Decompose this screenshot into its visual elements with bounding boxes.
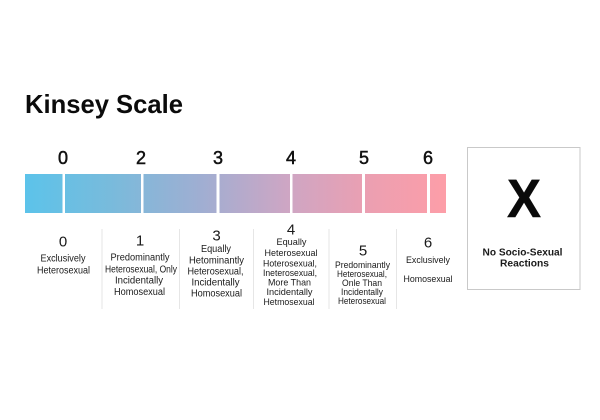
description: 5: Heterosexual <box>338 296 386 306</box>
description: 4: Incidentally <box>266 287 313 298</box>
scale numbers: 3 <box>213 148 223 168</box>
description: 4: Ineterosexual, <box>263 268 317 279</box>
title: Kinsey Scale <box>25 91 183 119</box>
description: 4: Equally <box>276 237 307 248</box>
description: 3: Homosexual <box>191 288 242 300</box>
description: 3 <box>188 228 244 300</box>
panel caption: Reactions <box>500 258 549 270</box>
panel caption: No Socio-Sexual <box>482 248 563 258</box>
scale numbers: 0 <box>58 148 68 168</box>
description: 4: 4 <box>287 222 295 238</box>
description: 0: 0 <box>59 234 67 250</box>
description: 6: 6 <box>424 234 432 252</box>
panel: X no socio-sexual reactions <box>468 148 580 290</box>
description: 1 <box>105 232 177 298</box>
scale numbers <box>58 148 433 168</box>
large X: X <box>507 169 541 229</box>
description: 5: Incidentally <box>341 287 383 297</box>
column dividers <box>102 229 396 309</box>
description: 3: Hetominantly <box>189 256 244 266</box>
description: 4: More Than <box>268 278 311 288</box>
scale numbers: 4 <box>286 148 296 168</box>
description: 1: Homosexual <box>114 287 165 298</box>
description: 5 <box>335 242 390 306</box>
description: 3: 3 <box>212 228 221 244</box>
description: 1: Heterosexual, Only <box>105 264 177 276</box>
description: 4: Hetmosexual <box>264 297 314 308</box>
description: 4 <box>263 222 318 308</box>
description: 5: Onle Than <box>342 278 382 288</box>
description: 4: Heterosexual <box>264 248 318 259</box>
scale numbers: 6 <box>423 148 433 168</box>
description: 1: 1 <box>136 232 144 250</box>
description: 5: 5 <box>359 242 367 260</box>
description: 0: Heterosexual <box>37 266 90 276</box>
description: 1: Predominantly <box>110 252 170 264</box>
description: 5: Heterosexual, <box>337 269 387 279</box>
description: 4: Hoterosexual, <box>263 258 317 270</box>
description: 3: Incidentally <box>192 278 240 288</box>
panel caption <box>482 248 563 270</box>
gradient scale bar <box>25 174 446 213</box>
description: 0: Exclusively <box>40 254 86 264</box>
scale numbers: 5 <box>359 148 369 168</box>
description: 3: Heterosexual, <box>188 266 244 278</box>
scale numbers: 2 <box>136 148 146 168</box>
description: 0 <box>37 234 90 276</box>
description: 6: Homosexual <box>404 274 452 285</box>
description: 6: Exclusively <box>406 255 450 266</box>
description: 1: Incidentally <box>115 276 163 286</box>
description: 5: Predominantly <box>335 260 390 270</box>
description: 6 <box>404 234 452 285</box>
description: 3: Equally <box>201 244 231 255</box>
